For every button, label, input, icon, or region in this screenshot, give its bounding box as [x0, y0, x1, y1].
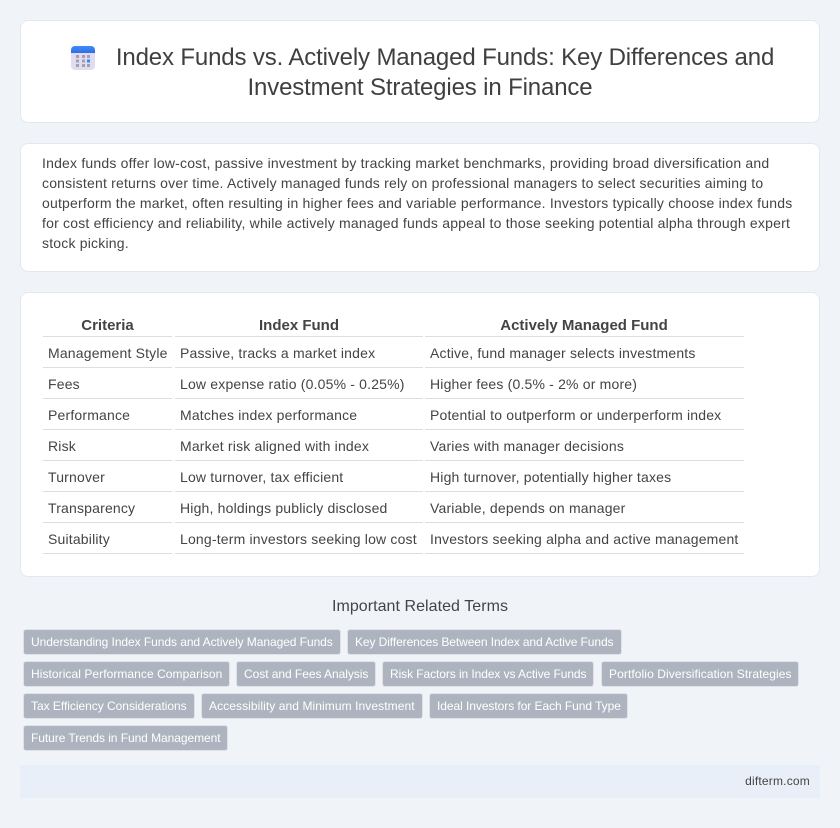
text: Suitability	[48, 531, 110, 547]
column headers: Actively Managed Fund	[500, 317, 668, 334]
footer credit: difterm.com	[745, 774, 810, 788]
column headers: Index Fund	[259, 317, 339, 334]
related term tags: Accessibility and Minimum Investment	[209, 699, 415, 713]
related term tags: Future Trends in Fund Management	[31, 731, 221, 745]
intro paragraph: for cost efficiency and reliability, while actively managed funds appeal to those seeking potential alpha through expert	[42, 215, 790, 231]
intro paragraph: Index funds offer low-cost, passive investment by tracking market benchmarks, providing broad diversification and	[42, 155, 769, 171]
panel: intro text card	[20, 143, 820, 272]
related term tags: Tax Efficiency Considerations	[31, 699, 187, 713]
row: suitability	[48, 531, 739, 547]
intro paragraph: stock picking.	[42, 235, 129, 251]
text: Low turnover, tax efficient	[180, 469, 343, 485]
title: Index Funds vs. Actively Managed Funds: Key Differences and	[116, 44, 774, 71]
text: Passive, tracks a market index	[180, 345, 375, 361]
text: Performance	[48, 407, 130, 423]
text: Low expense ratio (0.05% - 0.25%)	[180, 376, 405, 392]
text: High, holdings publicly disclosed	[180, 500, 388, 516]
text: Management Style	[48, 345, 168, 361]
row: fees	[48, 376, 637, 392]
text: Risk	[48, 438, 76, 454]
intro paragraph: outperform the market, often resulting in higher fees and variable performance. Investors typically choose index funds	[42, 195, 792, 211]
text: Matches index performance	[180, 407, 357, 423]
related term tags: Risk Factors in Index vs Active Funds	[390, 667, 586, 681]
row: turnover	[48, 469, 671, 485]
panel: comparison table card	[20, 292, 820, 577]
related term tags: Key Differences Between Index and Active Funds	[355, 635, 613, 649]
text: Market risk aligned with index	[180, 438, 369, 454]
text: Fees	[48, 376, 80, 392]
text: Active, fund manager selects investments	[430, 345, 696, 361]
related term tags: Ideal Investors for Each Fund Type	[437, 699, 621, 713]
related term tags: Understanding Index Funds and Actively Managed Funds	[31, 635, 333, 649]
related term tags	[23, 629, 799, 751]
text: High turnover, potentially higher taxes	[430, 469, 671, 485]
icon: calendar grid	[71, 46, 95, 70]
text: Turnover	[48, 469, 105, 485]
text: Long-term investors seeking low cost	[180, 531, 417, 547]
related term tags: Historical Performance Comparison	[31, 667, 222, 681]
column headers: Criteria	[81, 317, 134, 334]
text: Potential to outperform or underperform index	[430, 407, 721, 423]
intro paragraph	[42, 155, 792, 251]
text: Transparency	[48, 500, 135, 516]
text: Varies with manager decisions	[430, 438, 624, 454]
heading: important related terms: Important Related Terms	[332, 598, 508, 615]
panel: header card	[20, 20, 820, 123]
title	[116, 44, 774, 101]
footer bar	[20, 765, 820, 798]
text: Variable, depends on manager	[430, 500, 625, 516]
related term tags: Portfolio Diversification Strategies	[609, 667, 792, 681]
text: Higher fees (0.5% - 2% or more)	[430, 376, 637, 392]
title: Investment Strategies in Finance	[247, 74, 593, 101]
row: risk	[48, 438, 624, 454]
row: transparency	[48, 500, 626, 516]
intro paragraph: consistent returns over time. Actively managed funds rely on professional managers to select securities aiming to	[42, 175, 763, 191]
related term tags: Cost and Fees Analysis	[244, 667, 368, 681]
row: management style	[48, 345, 696, 361]
row: performance	[48, 407, 721, 423]
text: Investors seeking alpha and active management	[430, 531, 739, 547]
column headers	[81, 317, 668, 334]
